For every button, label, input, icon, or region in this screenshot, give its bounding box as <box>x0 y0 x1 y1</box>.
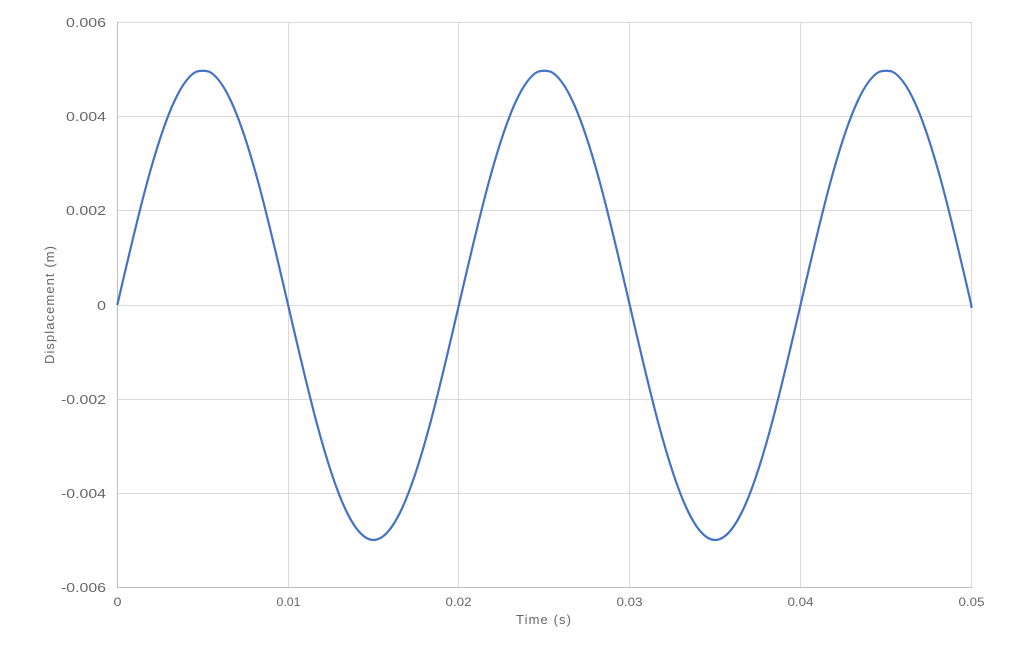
y axis tick labels <box>61 15 106 595</box>
y axis tick labels: 0 <box>97 298 106 313</box>
x axis tick labels: 0.04 <box>788 595 814 609</box>
x axis tick labels: 0.05 <box>958 595 985 609</box>
y axis title: Displacement (m) <box>42 246 57 364</box>
y axis tick labels: -0.004 <box>61 486 106 501</box>
y axis tick labels: 0.006 <box>66 15 106 30</box>
x axis tick labels: 0.01 <box>276 595 301 609</box>
x axis tick labels: 0.02 <box>446 595 472 609</box>
y axis tick labels: 0.002 <box>66 203 106 218</box>
displacement sine curve <box>117 71 972 540</box>
x axis tick labels <box>114 595 985 609</box>
x axis tick labels: 0.03 <box>616 595 643 609</box>
x axis tick labels: 0 <box>114 595 122 609</box>
y axis tick labels: 0.004 <box>66 109 106 124</box>
x axis title: Time (s) <box>516 612 571 627</box>
chart axes <box>117 22 972 588</box>
y axis tick labels: -0.006 <box>61 580 106 595</box>
y axis tick labels: -0.002 <box>61 392 106 407</box>
